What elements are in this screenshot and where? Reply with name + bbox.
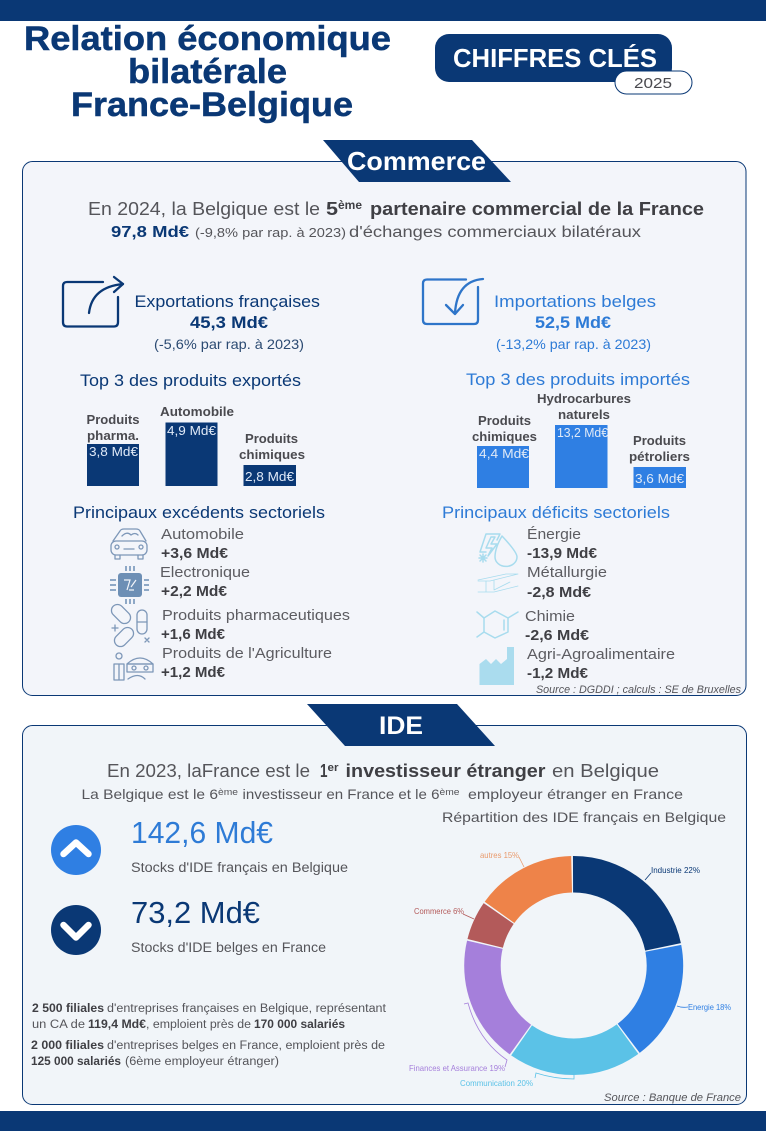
item: energie bbox=[527, 526, 597, 562]
item: automobile: +3,6 Md€ bbox=[161, 546, 228, 562]
chart: top exports bbox=[86, 405, 305, 486]
chart: top imports: Produits bbox=[633, 434, 686, 448]
item: agriculture: +1,2 Md€ bbox=[161, 665, 225, 681]
icon: molecule bbox=[477, 611, 518, 638]
icon: factory bbox=[480, 647, 514, 685]
panel: IDE bbox=[22, 704, 746, 1104]
item: agroalimentaire: Agri-Agroalimentaire bbox=[527, 647, 675, 663]
text: exports: 45,3 Md€ bbox=[190, 314, 268, 332]
text: french subsidiaries: 119,4 Md€ bbox=[88, 1019, 147, 1031]
chart: top exports: 4,9 Md€ bbox=[167, 424, 216, 438]
text: belgian subsidiaries: 125 000 salariés bbox=[31, 1056, 121, 1068]
item: agroalimentaire: -1,2 Md€ bbox=[527, 666, 588, 682]
stat: belgian FDI stock: Stocks d'IDE belges en France bbox=[131, 940, 326, 955]
chart: top exports: pharma. bbox=[87, 429, 139, 443]
stat: french FDI stock bbox=[131, 815, 348, 875]
text: commerce summary: (-9,8% par rap. à 2023) bbox=[195, 225, 346, 240]
item: agriculture bbox=[161, 646, 332, 681]
heading: top exports: Top 3 des produits exportés bbox=[80, 372, 301, 390]
item: electronique: +2,2 Md€ bbox=[161, 584, 227, 600]
text: commerce summary: 5 bbox=[326, 199, 338, 219]
bottom bar bbox=[0, 1111, 766, 1131]
icon: car bbox=[111, 529, 147, 559]
title: bilatérale bbox=[128, 53, 287, 91]
item: metallurgie: -2,8 Md€ bbox=[527, 585, 591, 601]
item: electronique: Electronique bbox=[160, 565, 250, 581]
item: energie: Énergie bbox=[527, 526, 581, 543]
heading: IDE bbox=[307, 704, 495, 746]
text: imports: Importations belges bbox=[494, 293, 656, 311]
chart: top imports: 13,2 Md€ bbox=[557, 426, 608, 440]
icon: import arrow bbox=[423, 279, 483, 324]
text: imports: 52,5 Md€ bbox=[535, 314, 611, 332]
chart: top exports: 3,8 Md€ bbox=[89, 445, 138, 459]
text: belgian subsidiaries: (6ème employeur étranger) bbox=[125, 1056, 279, 1068]
text: belgian subsidiaries bbox=[31, 1040, 385, 1068]
text: IDE summary: er bbox=[328, 762, 339, 774]
item: energie: -13,9 Md€ bbox=[527, 546, 597, 562]
text: exports: (-5,6% par rap. à 2023) bbox=[154, 336, 304, 352]
text: IDE summary: ème bbox=[440, 787, 460, 797]
text: IDE summary: ème bbox=[218, 787, 238, 797]
heading: surpluses: Principaux excédents sectoriels bbox=[73, 504, 325, 522]
item: agriculture: Produits de l'Agriculture bbox=[162, 646, 332, 662]
icon: steel beam bbox=[478, 574, 518, 592]
icon: export arrow bbox=[63, 277, 123, 326]
top bar bbox=[0, 0, 766, 21]
chart: top imports: 3,6 Md€ bbox=[635, 472, 684, 486]
stat: french FDI stock: Stocks d'IDE français en Belgique bbox=[131, 860, 348, 875]
item: metallurgie bbox=[527, 565, 607, 601]
title: France-Belgique bbox=[71, 86, 353, 124]
chart: top imports: 4,4 Md€ bbox=[479, 447, 529, 461]
item: electronique bbox=[160, 565, 250, 600]
item: automobile: Automobile bbox=[161, 527, 244, 543]
stat: belgian FDI stock: 73,2 Md€ bbox=[131, 895, 260, 930]
icon: energy bbox=[479, 534, 517, 566]
text: IDE summary: 1 bbox=[320, 761, 328, 781]
item: pharmaceutiques bbox=[161, 608, 350, 643]
title: Relation économique bbox=[24, 20, 391, 58]
item: pharmaceutiques: Produits pharmaceutiques bbox=[162, 608, 350, 624]
badge: chiffres clés 2025: CHIFFRES CLÉS bbox=[453, 43, 657, 73]
heading: commerce: Commerce bbox=[347, 146, 486, 176]
text: commerce summary: partenaire commercial de la France bbox=[370, 199, 704, 219]
chart: top imports: chimiques bbox=[472, 430, 537, 444]
text: french subsidiaries: d'entreprises françaises en Belgique, représentant bbox=[107, 1003, 387, 1015]
item: agroalimentaire bbox=[527, 647, 675, 682]
text: IDE summary: investisseur en France et le 6 bbox=[242, 786, 440, 802]
text: french subsidiaries: un CA de bbox=[32, 1019, 85, 1031]
source: commerce: Source : DGDDI ; calculs : SE de Bruxelles bbox=[536, 684, 741, 696]
text: IDE summary: En 2023, laFrance est le bbox=[107, 761, 310, 781]
chart: top exports: Produits bbox=[86, 413, 140, 427]
icon: pills bbox=[109, 602, 149, 649]
item: automobile bbox=[161, 527, 244, 562]
chart: donut FDI breakdown: Communication 20% bbox=[460, 1078, 533, 1088]
icon: farmer bbox=[114, 653, 153, 680]
badge: chiffres clés 2025: 2025 bbox=[634, 75, 672, 92]
chart: top exports: Automobile bbox=[160, 405, 234, 419]
text: IDE summary: investisseur étranger bbox=[346, 761, 546, 781]
text: belgian subsidiaries: d'entreprises belges en France, emploient près de bbox=[107, 1040, 385, 1052]
text: exports: Exportations françaises bbox=[134, 293, 320, 311]
chart: top imports: pétroliers bbox=[629, 450, 690, 464]
item: pharmaceutiques: +1,6 Md€ bbox=[161, 627, 225, 643]
heading: deficits: Principaux déficits sectoriels bbox=[442, 504, 670, 522]
text: exports bbox=[134, 293, 320, 352]
chart: top imports: Hydrocarbures bbox=[537, 392, 631, 406]
chart: donut FDI breakdown: Industrie 22% bbox=[651, 865, 700, 875]
chart: top imports bbox=[472, 392, 690, 488]
chart: top imports: naturels bbox=[558, 408, 610, 422]
chart: top exports: 2,8 Md€ bbox=[245, 470, 294, 484]
text: commerce summary bbox=[88, 199, 704, 241]
stat: french FDI stock: 142,6 Md€ bbox=[131, 815, 273, 850]
text: IDE summary: en Belgique bbox=[552, 761, 659, 781]
text: commerce summary: ème bbox=[338, 200, 362, 212]
text: commerce summary: 97,8 Md€ bbox=[111, 224, 189, 241]
text: french subsidiaries: , emploient près de bbox=[146, 1019, 251, 1031]
heading: IDE: IDE bbox=[379, 712, 423, 740]
text: commerce summary: d'échanges commerciaux bilatéraux bbox=[349, 224, 641, 241]
stat: belgian FDI stock bbox=[131, 895, 326, 955]
chart: top exports: chimiques bbox=[239, 448, 305, 462]
text: IDE summary: La Belgique est le 6 bbox=[82, 786, 218, 802]
source: IDE: Source : Banque de France bbox=[604, 1092, 741, 1104]
heading: FDI breakdown: Répartition des IDE français en Belgique bbox=[442, 809, 726, 825]
text: french subsidiaries: 2 500 filiales bbox=[32, 1003, 104, 1015]
item: chimie: -2,6 Md€ bbox=[525, 628, 589, 644]
text: belgian subsidiaries: 2 000 filiales bbox=[31, 1040, 104, 1052]
item: chimie: Chimie bbox=[525, 609, 575, 625]
badge: chiffres clés 2025 bbox=[435, 34, 692, 94]
item: chimie bbox=[525, 609, 589, 644]
icon: chevron down bbox=[51, 905, 101, 955]
text: IDE summary bbox=[82, 761, 683, 802]
heading: top imports: Top 3 des produits importés bbox=[466, 371, 690, 389]
text: french subsidiaries bbox=[32, 1003, 387, 1031]
text: commerce summary: En 2024, la Belgique est le bbox=[88, 199, 320, 219]
icon: chevron up bbox=[51, 825, 101, 875]
chart: top exports: Produits bbox=[245, 432, 298, 446]
item: metallurgie: Métallurgie bbox=[527, 565, 607, 581]
text: french subsidiaries: 170 000 salariés bbox=[254, 1019, 345, 1031]
chart: top imports: Produits bbox=[478, 414, 531, 428]
chart: donut FDI breakdown bbox=[409, 850, 731, 1088]
chart: donut FDI breakdown: autres 15% bbox=[480, 850, 519, 860]
chart: donut FDI breakdown: Commerce 6% bbox=[414, 906, 464, 916]
panel: commerce bbox=[22, 140, 746, 696]
chart: donut FDI breakdown: Finances et Assurance 19% bbox=[409, 1063, 505, 1073]
text: imports bbox=[494, 293, 656, 352]
heading: commerce bbox=[323, 140, 511, 182]
text: imports: (-13,2% par rap. à 2023) bbox=[496, 336, 651, 352]
text: IDE summary: employeur étranger en France bbox=[468, 786, 683, 802]
title bbox=[24, 20, 391, 124]
icon: chip bbox=[110, 566, 149, 604]
chart: donut FDI breakdown: Energie 18% bbox=[688, 1002, 731, 1012]
